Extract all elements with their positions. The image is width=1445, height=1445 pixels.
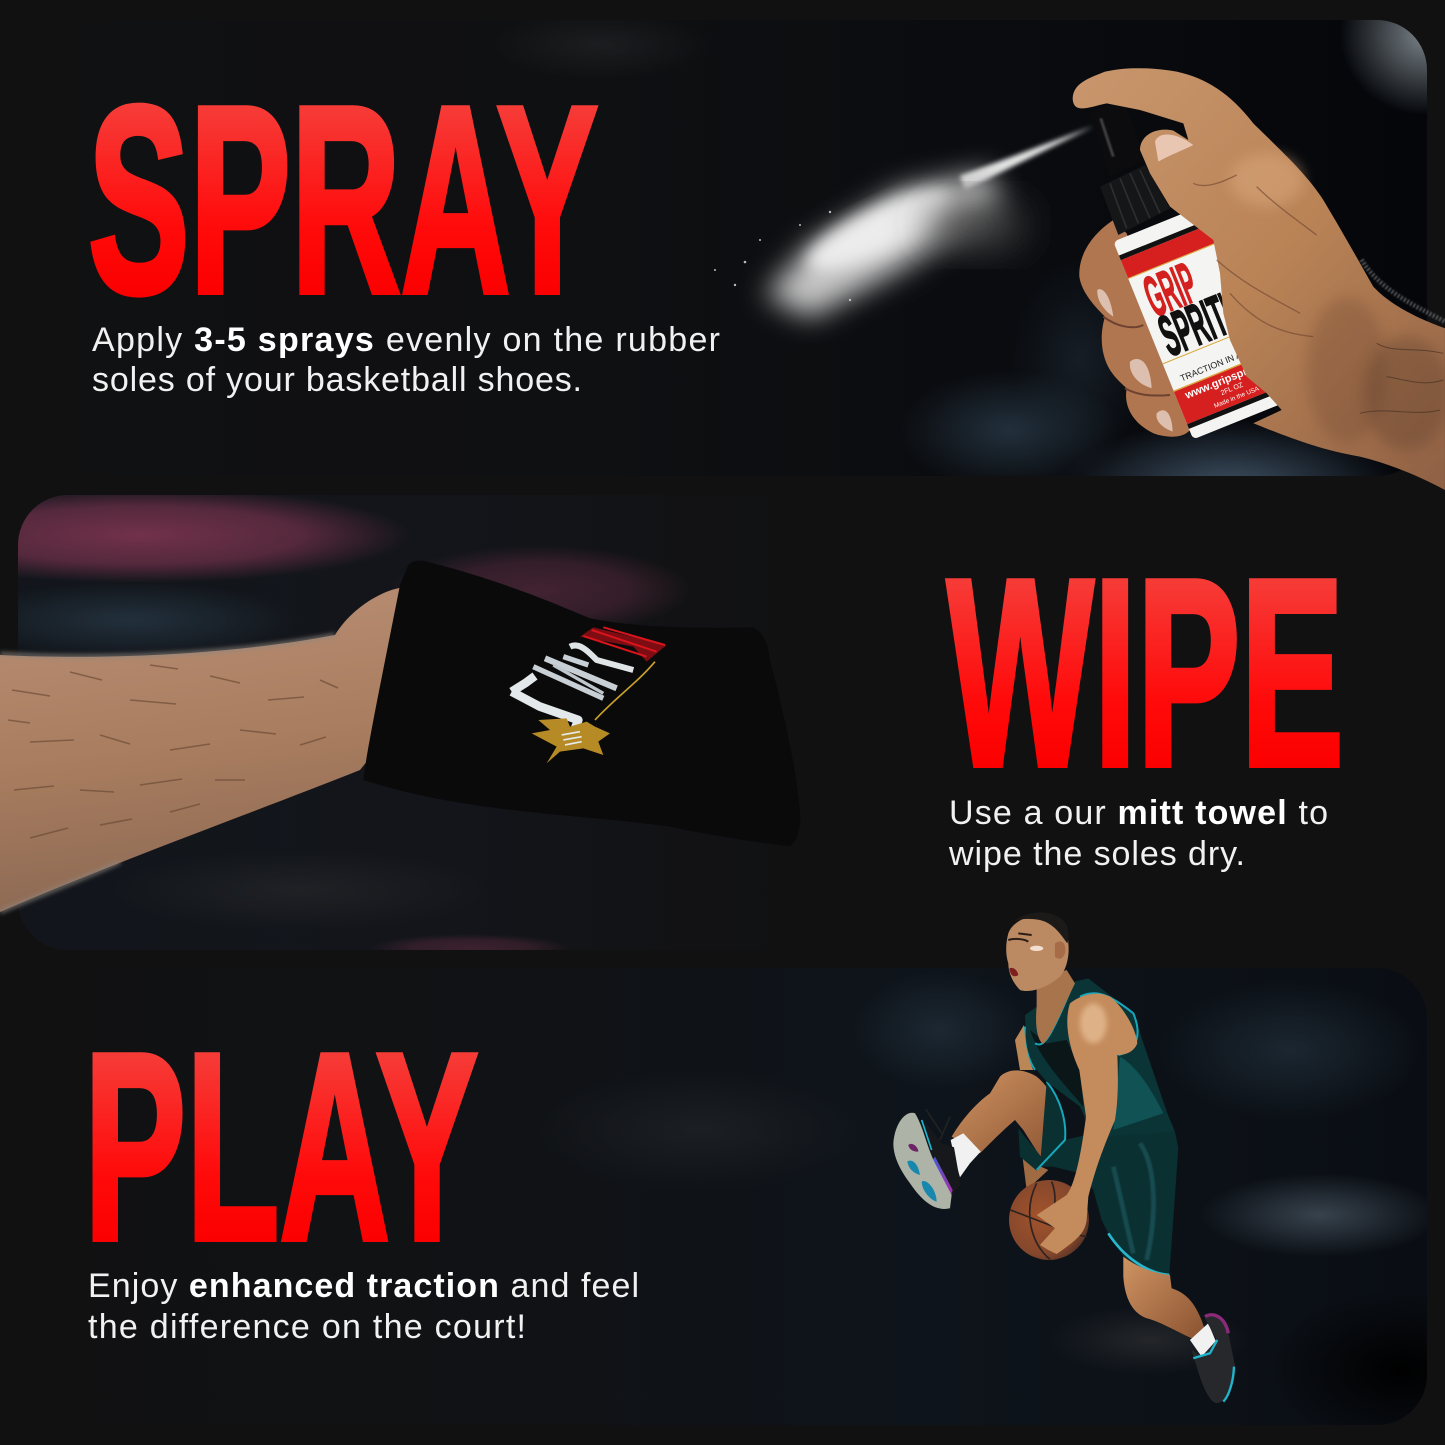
heading: PLAY: PLAY xyxy=(84,997,478,1296)
arm xyxy=(0,587,405,912)
spray bottle: 2FL OZ xyxy=(1220,382,1245,397)
arm highlight xyxy=(1080,1003,1107,1043)
planted shoe xyxy=(1192,1315,1236,1403)
hand shading xyxy=(1193,153,1445,450)
text block: wipe instructions: Use a our mitt towel to xyxy=(949,794,1328,832)
head xyxy=(1006,912,1069,991)
fingers behind bottle xyxy=(1079,220,1190,437)
icon: spray mist xyxy=(714,126,1094,318)
jersey xyxy=(1025,978,1175,1137)
spray bottle: SPRIT' xyxy=(1150,282,1241,369)
thumbnail xyxy=(1155,135,1193,162)
spray bottle xyxy=(1113,199,1298,439)
spray bottle: www.gripspritz.com xyxy=(1183,351,1285,402)
left arm sliver xyxy=(1015,1025,1033,1070)
spray bottle: Made in the USA xyxy=(1213,385,1261,410)
illustration: basketball player xyxy=(893,912,1236,1403)
arm hair texture xyxy=(8,665,338,838)
basketball xyxy=(1009,1180,1089,1260)
spray bottle: GRIP xyxy=(1135,251,1206,330)
spray bottle: TRACTION IN A BOTTLE xyxy=(1179,336,1277,383)
raised leg sock xyxy=(951,1133,981,1177)
dribbling arm xyxy=(1037,994,1137,1254)
lower leg behind ball xyxy=(1023,1158,1048,1190)
illustration: hand holding spray bottle xyxy=(1073,68,1445,490)
bottle body xyxy=(1113,206,1281,439)
embroidered logo xyxy=(512,627,667,763)
palm and thumb xyxy=(1073,68,1445,490)
raised leg xyxy=(952,1070,1065,1162)
arm edge hair xyxy=(0,635,335,912)
illustration: arm in mitt towel xyxy=(0,561,801,912)
text block: spray instructions: soles of your basketball shoes. xyxy=(92,361,582,399)
heading: SPRAY: SPRAY xyxy=(88,50,598,349)
arm hair xyxy=(1362,260,1445,322)
text block: wipe instructions: wipe the soles dry. xyxy=(948,835,1245,873)
mitt towel xyxy=(363,561,801,846)
neck and chest xyxy=(1036,970,1075,1044)
text block: spray instructions xyxy=(92,321,720,399)
text block: spray instructions: Apply 3-5 sprays evenly on the rubber xyxy=(92,321,720,359)
nozzle and cap xyxy=(1090,104,1170,235)
panel: wipe background xyxy=(18,495,677,950)
panel: play background xyxy=(578,968,1427,1425)
text block: wipe instructions xyxy=(948,794,1328,873)
planted leg xyxy=(1123,1257,1205,1340)
text block: play instructions xyxy=(88,1267,639,1346)
panel: spray background xyxy=(554,20,1427,476)
planted leg sock xyxy=(1190,1323,1217,1357)
shorts xyxy=(1018,1082,1178,1275)
raised shoe xyxy=(893,1109,961,1209)
text block: play instructions: Enjoy enhanced traction and feel xyxy=(88,1267,639,1305)
text block: play instructions: the difference on the court! xyxy=(88,1308,526,1346)
